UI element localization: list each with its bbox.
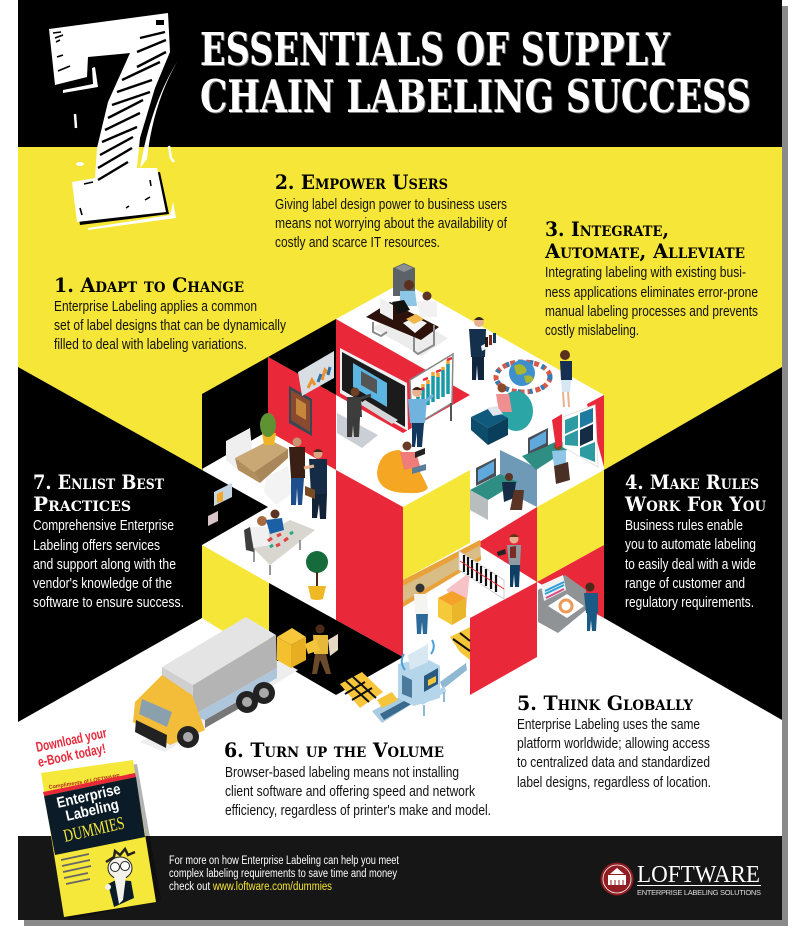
section 6: turn up the volume: efficiency, regardless of printer's make and model.	[225, 802, 491, 819]
top white floor	[336, 282, 604, 547]
footer band	[18, 836, 782, 920]
section 3: integrate, automate, alleviate: costly mislabeling.	[545, 322, 639, 339]
logo: loftware	[600, 862, 761, 897]
callout: download e-book	[34, 724, 108, 770]
section 3: integrate, automate, alleviate: Integrating labeling with existing busi-	[545, 264, 746, 281]
logo: loftware: LOFTWARE	[637, 862, 760, 888]
callout: download e-book: e-Book today!	[36, 740, 107, 770]
section 5: think globally	[517, 691, 711, 791]
left black area	[18, 367, 202, 722]
black triangle wall	[268, 319, 336, 395]
illustration: strapped boxes	[340, 672, 383, 708]
section 6: turn up the volume: client software and offering speed and network	[225, 783, 475, 800]
callout: download e-book: Download your	[34, 724, 108, 755]
left wall black	[202, 357, 268, 470]
footer text: check out www.loftware.com/dummies	[169, 881, 332, 893]
section 7: enlist best practices: 7. Enlist Best	[33, 470, 165, 494]
illustration: topiary plant	[306, 551, 328, 600]
illustration: yellow delivery truck	[133, 617, 298, 752]
lower-left white floor	[202, 431, 336, 620]
illustration: two businessmen shaking hands	[289, 438, 327, 519]
truck cab	[133, 675, 205, 745]
section 2: empower users	[275, 170, 508, 251]
red triangle right	[537, 545, 604, 618]
black triangle lower left	[202, 470, 268, 545]
illustration: man on yellow bean chair	[377, 442, 428, 493]
section 7: enlist best practices: software to ensure success.	[33, 594, 184, 611]
book cover: DUMMIES	[61, 812, 126, 846]
illustration: man in blue at whiteboard	[408, 387, 433, 447]
truck box side	[192, 635, 277, 716]
illustration: whiteboard chart	[410, 354, 453, 427]
illustration: conveyor and scanner machine	[372, 640, 467, 723]
section 5: think globally: 5. Think Globally	[517, 691, 694, 715]
section 4: make rules work for you: 4. Make Rules	[625, 470, 759, 494]
illustration: man with tray	[469, 317, 497, 380]
yellow panel left	[202, 545, 269, 660]
yellow panel center	[403, 470, 470, 580]
section 3: integrate, automate, alleviate: Automate, Alleviate	[544, 239, 745, 263]
illustration: stacked pallet and carrier	[277, 624, 338, 674]
section 7: enlist best practices: vendor's knowledge of the	[33, 575, 172, 592]
red right sliver	[587, 395, 604, 467]
section 1: adapt to change: 1. Adapt to Change	[54, 273, 244, 297]
illustration: pallet of boxes	[438, 591, 466, 625]
illustration: woman standing	[560, 350, 572, 407]
illustration: conference table team	[244, 510, 315, 575]
section 4: make rules work for you: range of customer and	[625, 575, 745, 592]
section 7: enlist best practices: and support along with the	[33, 556, 176, 573]
section 6: turn up the volume	[224, 738, 491, 819]
white upper-right floor	[470, 470, 537, 543]
section 2: empower users: means not worrying about the availability of	[275, 215, 508, 232]
warehouse floor	[403, 543, 537, 657]
footer text: For more on how Enterprise Labeling can help you meet	[169, 855, 400, 867]
book cover: Compliments of LOFTWARE	[48, 774, 121, 791]
big number 7	[49, 13, 177, 230]
section 5: think globally: platform worldwide; allowing access	[517, 735, 710, 752]
truck wheels	[236, 691, 258, 713]
right black area	[604, 367, 782, 720]
yellow background	[18, 147, 782, 470]
illustration: executive desk	[366, 263, 448, 356]
illustration: cubicle workstations	[470, 414, 570, 520]
red wall left	[268, 357, 336, 470]
truck box top	[162, 617, 276, 685]
truck chassis	[192, 668, 277, 720]
section 7: enlist best practices: Comprehensive Enterprise	[33, 517, 174, 534]
illustration: man at monitor	[347, 388, 371, 437]
illustration: barcode scanner beam	[446, 551, 504, 610]
section 2: empower users: Giving label design power to business users	[275, 196, 507, 213]
section 4: make rules work for you: Work For You	[624, 492, 766, 516]
section 2: empower users: costly and scarce IT resources.	[275, 234, 440, 251]
illustration: wall chart	[298, 351, 334, 396]
section 1: adapt to change: set of label designs that can be dynamically	[54, 317, 286, 334]
book cover: Labeling	[64, 796, 121, 825]
section 1: adapt to change: filled to deal with labeling variations.	[54, 336, 247, 353]
section 5: think globally: Enterprise Labeling uses the same	[517, 716, 700, 733]
title	[200, 23, 752, 124]
section 1: adapt to change: Enterprise Labeling applies a common	[54, 298, 257, 315]
red big panel	[336, 470, 403, 657]
section 6: turn up the volume: 6. Turn up the Volume	[224, 738, 444, 762]
yellow panel right	[537, 470, 604, 582]
red panel lower right	[470, 582, 537, 695]
illustration: printer and operator	[538, 575, 598, 633]
illustration: keyboard floor	[337, 413, 378, 448]
black panel lower	[269, 583, 403, 695]
section 2: empower users: 2. Empower Users	[275, 170, 448, 194]
illustration: man with clipboard	[497, 534, 521, 587]
section 4: make rules work for you: regulatory requirements.	[625, 594, 754, 611]
illustration: warehouse worker	[414, 584, 428, 634]
illustration: office sofa, desk and plant	[226, 413, 292, 505]
section 7: enlist best practices	[33, 470, 184, 611]
red wall back	[336, 319, 470, 433]
section 4: make rules work for you	[624, 470, 766, 611]
book cover: Enterprise	[55, 781, 122, 812]
red triangle	[476, 507, 537, 582]
truck box front	[162, 667, 193, 716]
panel: isometric cube	[202, 282, 604, 695]
section 1: adapt to change	[54, 273, 286, 353]
section 6: turn up the volume: Browser-based labeling means not installing	[225, 764, 459, 781]
illustration: boxes by red panel	[450, 627, 470, 660]
section 4: make rules work for you: Business rules enable	[625, 517, 743, 534]
book cover	[41, 760, 161, 920]
illustration: globe with flag ring	[496, 360, 550, 392]
section 5: think globally: label designs, regardless of location.	[517, 774, 711, 791]
illustration: wall monitor	[340, 348, 408, 431]
section 4: make rules work for you: to easily deal with a wide	[625, 556, 756, 573]
section 7: enlist best practices: Practices	[33, 492, 131, 516]
section 3: integrate, automate, alleviate	[544, 217, 758, 339]
section 3: integrate, automate, alleviate: 3. Integrate,	[545, 217, 669, 241]
footer text	[169, 855, 400, 893]
icons on black wall	[208, 483, 232, 526]
section 4: make rules work for you: you to automate labeling	[625, 536, 756, 553]
illustration: storage cabinet	[563, 405, 598, 467]
logo: loftware: ENTERPRISE LABELING SOLUTIONS	[637, 888, 761, 897]
illustration: warehouse shelf	[403, 540, 481, 607]
section 7: enlist best practices: Labeling offers services	[33, 537, 160, 554]
header band	[18, 0, 782, 147]
illustration: painting	[289, 386, 312, 436]
section 5: think globally: to centralized data and standardized	[517, 754, 710, 771]
illustration: woman on teal bean with laptop	[471, 384, 533, 445]
footer text: complex labeling requirements to save time and money	[169, 868, 397, 880]
